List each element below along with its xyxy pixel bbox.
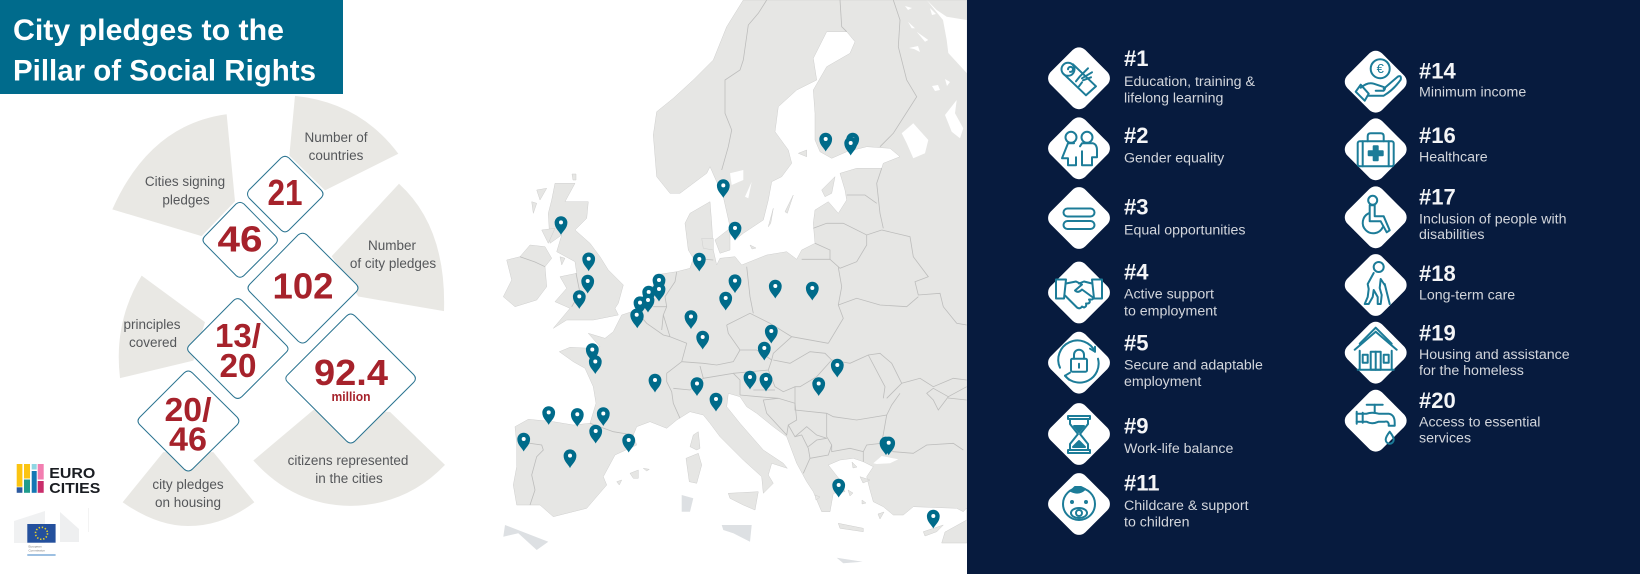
map: faded offshore shapes [503,495,863,563]
sectors: grey fan shapes behind labels [112,96,445,526]
title banner: Pillar of Social Rights [13,54,316,88]
principle 5: Secure and adaptable [1124,358,1263,374]
text: inclusion: #17 [1419,185,1456,210]
diamond: 13/20 principles: 13/ [215,317,261,354]
map: country borders [518,0,967,505]
principle 1: Education, training & [1124,74,1255,90]
principle 9: Work-life balance [1124,441,1233,457]
text: housing: #19 [1419,321,1456,346]
principle 4: Active support [1124,286,1214,302]
principle 18: Long-term care [1419,288,1515,304]
text: gender equality: #2 [1124,123,1148,148]
label: number of city pledges: Number [368,238,417,253]
principle 2: Gender equality [1124,150,1225,166]
principle 20 [1341,386,1540,455]
principle 20: Access to essential [1419,415,1540,431]
text: active support: #4 [1124,260,1149,285]
diamond: 21 countries [248,156,323,232]
label: city pledges on housing: on housing [155,495,221,510]
text: equal opportunities: #3 [1124,195,1148,220]
diamond: 46 cities: 46 [218,218,262,260]
logo: Eurocities: CITIES [49,480,100,497]
label: cities signing pledges: pledges [162,192,210,208]
icon: man and woman [1044,114,1114,183]
principle 9 [1044,399,1233,469]
icon: hand with euro coin [1341,47,1410,116]
label: cities signing pledges: Cities signing [145,174,225,189]
label: number of city pledges: of city pledges [350,256,436,271]
text: secure employment: #5 [1124,330,1148,355]
principle 4 [1044,258,1217,327]
icon: baby with pacifier [1044,469,1114,539]
icon: elderly person with cane [1341,250,1410,320]
diamond: 20/46 housing pledges [138,371,239,471]
text: education: #1 [1124,46,1148,71]
icon: hand with euro coin: € [1377,61,1385,76]
principle 17: disabilities [1419,227,1484,243]
principle 2 [1044,114,1225,183]
text: healthcare: #16 [1419,123,1456,148]
text: access to essential services: #20 [1419,388,1456,413]
title banner [0,0,343,94]
map: city location pins [517,133,940,529]
principle 1: lifelong learning [1124,91,1223,107]
text: long-term care: #18 [1419,261,1456,286]
principle 16: Healthcare [1419,150,1488,166]
principle 4: to employment [1124,304,1217,320]
panel: Europe map [503,0,967,563]
principle 1 [1044,44,1255,113]
diamond: 92.4 million citizens: million [332,390,370,404]
map: land masses [503,0,967,563]
principle 14 [1341,47,1526,116]
diamond: 102 pledges [248,233,358,343]
panel: key figures [112,96,445,526]
principle 14: Minimum income [1419,85,1526,101]
icon: handshake [1044,258,1114,327]
diamond: 13/20 principles: 20 [220,347,256,384]
logo: European Commission [14,508,89,556]
diamond: 20/46 housing pledges: 46 [169,420,207,458]
label: city pledges on housing: city pledges [152,477,224,492]
title banner: City pledges to the [13,14,284,47]
label: number of countries: Number of [304,130,368,145]
panel: dark principles background [967,0,1640,574]
icon: house [1341,318,1410,387]
principle 11: Childcare & support [1124,498,1249,514]
principle 19: for the homeless [1419,363,1524,379]
diamond: 92.4 million citizens: 92.4 [314,352,388,393]
icon: diploma [1044,44,1114,113]
principle 11 [1044,469,1249,539]
principle 16 [1341,115,1488,184]
logo: Eurocities [17,464,100,497]
principle 17: Inclusion of people with [1419,211,1566,227]
label: citizens represented in the cities: citizens represented [288,453,408,468]
icon: water tap [1341,386,1410,455]
icon: first aid case [1341,115,1410,184]
diamond: 13/20 principles [188,299,288,398]
logo: Eurocities: EURO [49,465,96,482]
icon: lock with arrows [1044,328,1114,397]
icon: equals sign [1044,183,1114,253]
label: principles covered: principles [123,317,181,332]
diamond: 20/46 housing pledges: 20/ [164,391,212,428]
principle 19 [1341,318,1570,387]
logo: European Commission: Commission [28,548,45,552]
label: citizens represented in the cities: in the cities [315,471,383,486]
icon: hourglass [1044,399,1114,469]
principle 5: employment [1124,374,1201,390]
principle 17 [1341,183,1566,252]
diamond: 92.4 million citizens [286,314,415,443]
label: number of countries: countries [309,148,364,163]
principle 18 [1341,250,1515,320]
logo: European Commission: European [28,544,42,548]
map: lakes and inland water [730,0,967,464]
principle 20: services [1419,431,1471,447]
text: work-life balance: #9 [1124,414,1148,439]
text: childcare: #11 [1124,471,1160,496]
icon: wheelchair user [1341,183,1410,252]
diamond: 102 pledges: 102 [272,266,334,306]
principle 19: Housing and assistance [1419,347,1570,363]
principle 3: Equal opportunities [1124,222,1245,238]
label: principles covered: covered [129,335,177,350]
diamond: 21 countries: 21 [268,172,302,213]
principle 11: to children [1124,515,1189,531]
principle 3 [1044,183,1245,253]
text: minimum income: #14 [1419,59,1456,84]
diamond: 46 cities [203,202,277,277]
principle 5 [1044,328,1263,397]
